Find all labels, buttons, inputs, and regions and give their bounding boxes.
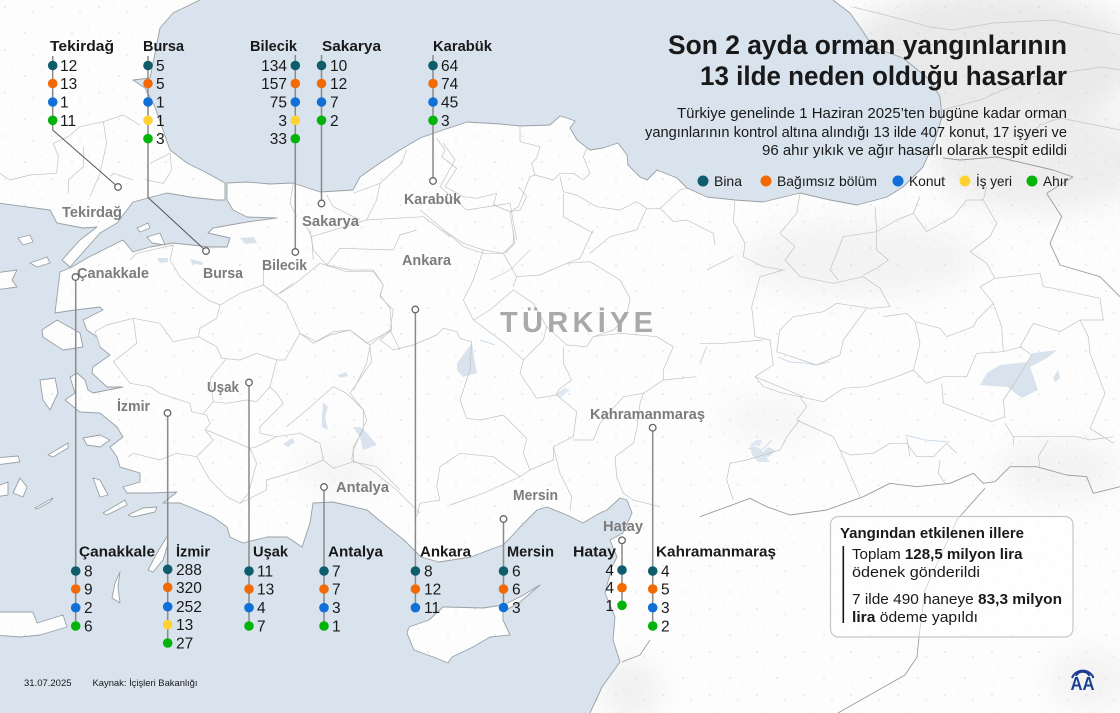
- column: Kahramanmaraş: 3: [661, 600, 670, 617]
- column: Bursa: 1: [156, 113, 165, 130]
- map place labels: [62, 192, 705, 535]
- title: Son 2 ayda orman yangınlarının: [668, 30, 1067, 60]
- column: Hatay: [573, 537, 627, 615]
- column: Uşak: 4: [257, 600, 266, 617]
- column: Çanakkale: [71, 274, 155, 636]
- column: Karabük: [428, 39, 493, 184]
- callout panel: budget: [830, 516, 1073, 637]
- column: Ankara: 12: [424, 582, 441, 598]
- column: Bilecik: 3: [278, 113, 287, 130]
- callout panel: budget: 7 ilde 490 haneye 83,3 milyon: [852, 591, 1062, 608]
- map place labels: Mersin: [513, 488, 558, 504]
- column: Sakarya: [317, 39, 382, 207]
- map place labels: Karabük: [404, 192, 462, 208]
- column: Antalya: Antalya: [328, 544, 384, 560]
- column: Çanakkale: Çanakkale: [79, 544, 155, 560]
- map place labels: İzmir: [117, 398, 150, 415]
- footer source: Kaynak: İçişleri Bakanlığı: [92, 678, 198, 689]
- column: Bilecik: 157: [261, 76, 287, 93]
- column: Hatay: 4: [605, 562, 614, 580]
- column: Tekirdağ: [48, 39, 121, 190]
- column: Çanakkale: 6: [84, 618, 93, 636]
- column: Karabük: 45: [441, 94, 458, 112]
- column: Antalya: 7: [332, 564, 341, 580]
- column: Kahramanmaraş: Kahramanmaraş: [656, 544, 776, 560]
- column: Sakarya: 7: [330, 94, 339, 112]
- column: İzmir: İzmir: [176, 544, 210, 560]
- legend: İş yeri: [976, 172, 1012, 189]
- lakes and rivers: [157, 237, 1060, 462]
- international borders: [622, 157, 1120, 713]
- column: Mersin: Mersin: [507, 544, 554, 560]
- column: Sakarya: Sakarya: [322, 39, 382, 55]
- map place labels: Sakarya: [302, 214, 360, 230]
- column: Kahramanmaraş: 5: [661, 582, 670, 598]
- province borders: [0, 115, 1113, 517]
- column: Uşak: 13: [257, 582, 274, 598]
- column: Bilecik: 134: [261, 58, 287, 75]
- column: İzmir: 252: [176, 599, 202, 616]
- title: 13 ilde neden olduğu hasarlar: [700, 61, 1067, 91]
- column: Çanakkale: 9: [84, 582, 93, 598]
- description text: 96 ahır yıkık ve ağır hasarlı olarak tespit edildi: [762, 143, 1067, 159]
- legend: Bina: [714, 173, 742, 189]
- column: Bursa: [143, 39, 209, 254]
- column: İzmir: 27: [176, 636, 193, 652]
- column: Sakarya: 10: [330, 58, 348, 75]
- column: Antalya: [319, 484, 384, 636]
- column: Mersin: [499, 516, 554, 617]
- column: Bilecik: 33: [270, 131, 287, 148]
- column: Karabük: Karabük: [433, 39, 493, 55]
- description text: Türkiye genelinde 1 Haziran 2025’ten bugüne kadar orman: [677, 106, 1067, 122]
- column: Antalya: 3: [332, 600, 341, 617]
- map place labels: Kahramanmaraş: [590, 407, 705, 423]
- column: Çanakkale: 2: [84, 600, 93, 617]
- map place labels: Bursa: [203, 266, 244, 282]
- column: Karabük: 64: [441, 58, 459, 75]
- column: Çanakkale: 8: [84, 564, 93, 580]
- map place labels: Antalya: [336, 480, 390, 496]
- column: Bilecik: 75: [270, 94, 287, 112]
- column: Uşak: 7: [257, 618, 266, 636]
- callout panel: budget: lira ödeme yapıldı: [852, 609, 978, 626]
- column: Tekirdağ: 12: [60, 58, 77, 75]
- logo: AA: AA: [1070, 674, 1094, 694]
- column: Ankara: 11: [424, 600, 440, 617]
- column: Bursa: 3: [156, 131, 165, 148]
- Caucasus borders: [853, 7, 1120, 160]
- column: Karabük: 3: [441, 113, 450, 130]
- column: Bursa: 1: [156, 94, 165, 112]
- column: İzmir: [163, 410, 210, 652]
- column: Karabük: 74: [441, 76, 459, 93]
- legend: Konut: [909, 173, 945, 189]
- description text: yangınlarının kontrol altına alındığı 13 ilde 407 konut, 17 işyeri ve: [645, 125, 1067, 141]
- column: Mersin: 3: [512, 600, 521, 617]
- legend: Bağımsız bölüm: [777, 173, 877, 189]
- column: Sakarya: 2: [330, 113, 339, 130]
- column: Kahramanmaraş: 2: [661, 618, 670, 636]
- callout panel: budget: ödenek gönderildi: [852, 564, 980, 581]
- column: Kahramanmaraş: [648, 424, 776, 636]
- column: Hatay: Hatay: [573, 544, 616, 560]
- column: Bilecik: Bilecik: [250, 39, 298, 55]
- column: Bilecik: [250, 39, 300, 255]
- footer date: 31.07.2025: [24, 678, 72, 689]
- legend: Ahır: [1043, 173, 1068, 189]
- column: Bursa: Bursa: [143, 39, 185, 55]
- column: Sakarya: 12: [330, 76, 347, 93]
- column: Ankara: Ankara: [420, 544, 472, 560]
- callout panel: budget: Toplam 128,5 milyon lira: [852, 546, 1023, 563]
- column: Bursa: 5: [156, 58, 165, 75]
- column: Tekirdağ: 13: [60, 76, 77, 93]
- column: Hatay: 4: [605, 580, 614, 597]
- legend: [698, 172, 1068, 189]
- map place labels: Ankara: [402, 253, 452, 269]
- column: Ankara: [411, 306, 472, 617]
- column: Tekirdağ: Tekirdağ: [50, 39, 114, 55]
- column: İzmir: 13: [176, 617, 193, 634]
- map place labels: Uşak: [207, 380, 240, 396]
- description text: [645, 106, 1067, 159]
- column: Kahramanmaraş: 4: [661, 564, 670, 580]
- column: Bursa: 5: [156, 76, 165, 93]
- column: Uşak: 11: [257, 564, 273, 580]
- map place labels: Bilecik: [262, 258, 308, 274]
- map place labels: Tekirdağ: [62, 205, 122, 221]
- column: Uşak: Uşak: [253, 544, 289, 560]
- column: Tekirdağ: 11: [60, 113, 76, 130]
- map place labels: Çanakkale: [77, 266, 149, 282]
- column: Ankara: 8: [424, 564, 433, 580]
- map place labels: Hatay: [603, 519, 643, 535]
- column: Hatay: 1: [605, 598, 614, 615]
- country label: TÜRKİYE: [500, 306, 653, 339]
- column: İzmir: 320: [176, 580, 202, 597]
- column: Tekirdağ: 1: [60, 94, 69, 112]
- column: Mersin: 6: [512, 564, 521, 580]
- callout panel: budget: Yangından etkilenen illere: [840, 526, 1024, 542]
- column: Mersin: 6: [512, 582, 521, 598]
- column: İzmir: 288: [176, 562, 202, 579]
- title: [668, 30, 1067, 91]
- column: Uşak: [244, 379, 289, 636]
- column: Antalya: 7: [332, 582, 341, 598]
- column: Antalya: 1: [332, 618, 341, 636]
